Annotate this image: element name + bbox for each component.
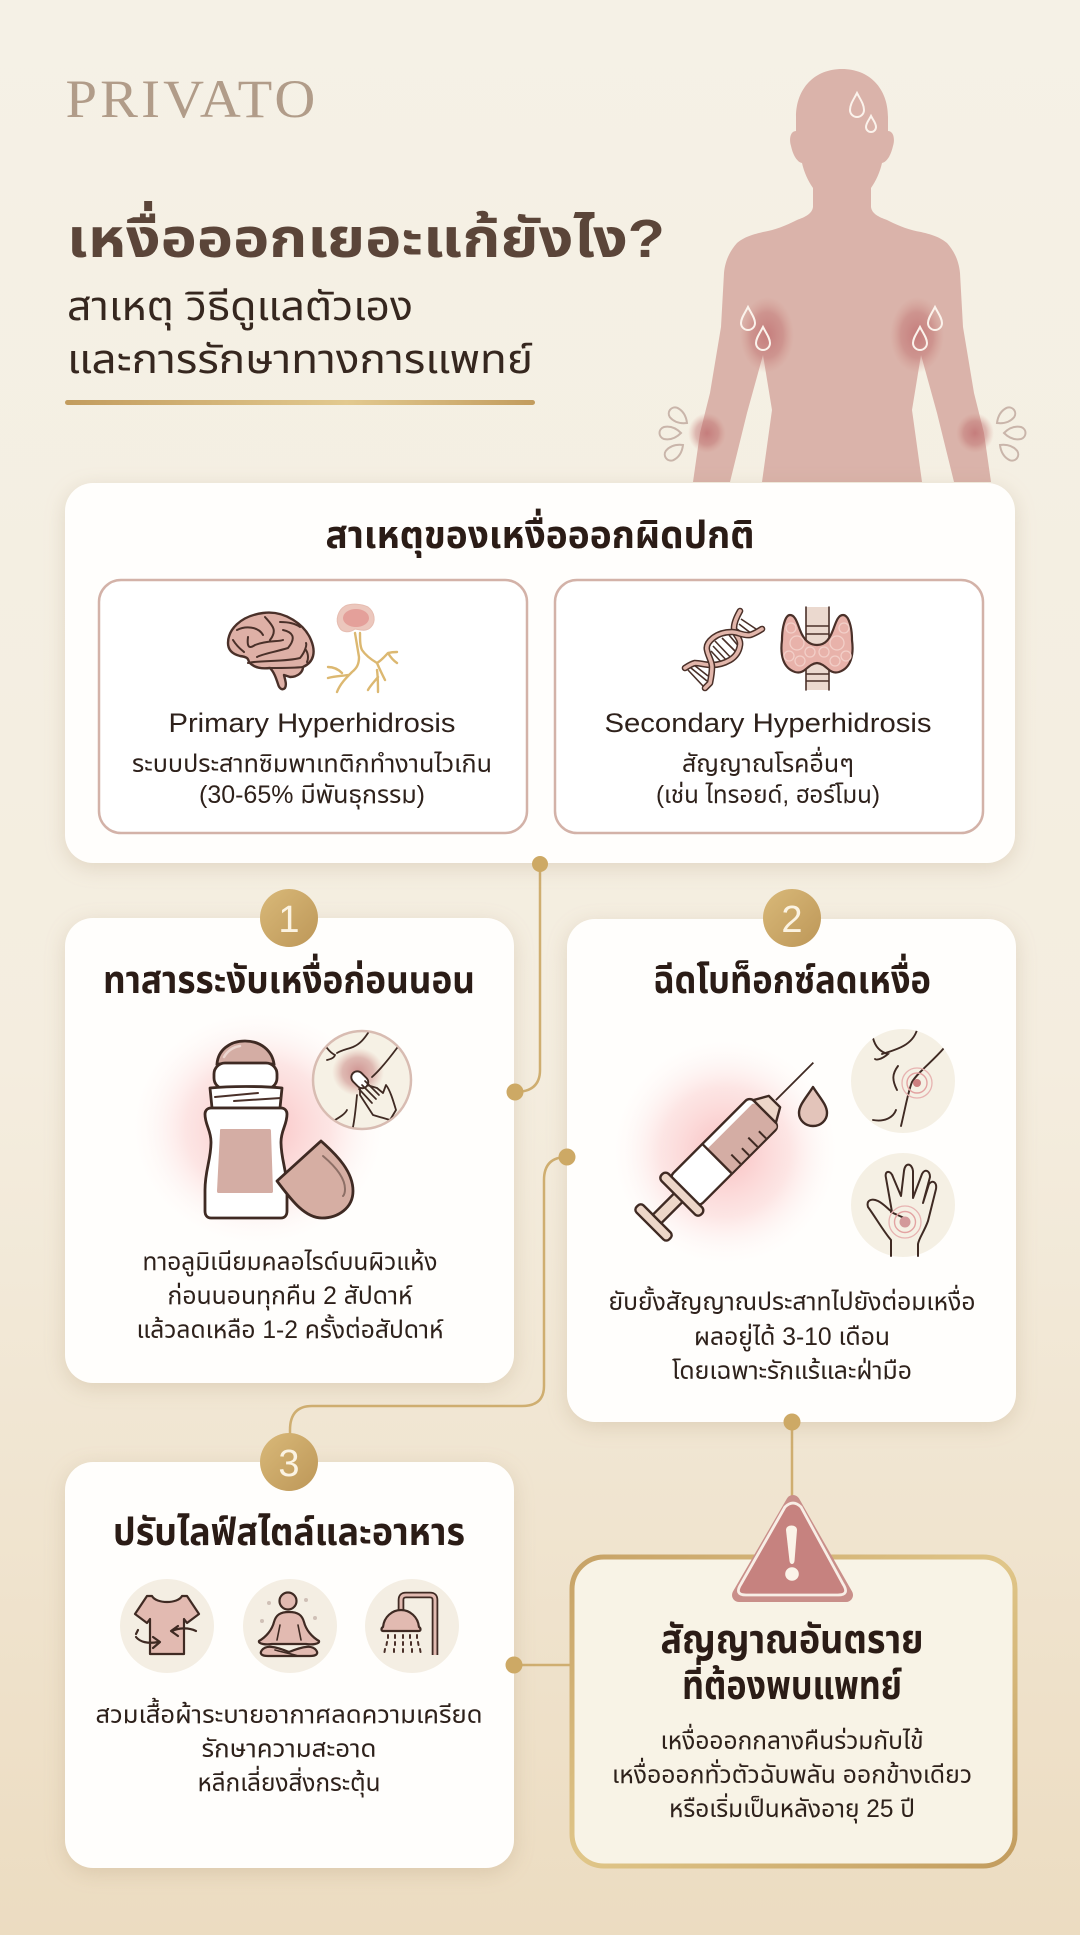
connector dot: step 3 bbox=[506, 1656, 522, 1674]
icon: meditation bbox=[243, 1579, 337, 1673]
step 2 text: โดยเฉพาะรักแร้และฝ่ามือ bbox=[672, 1357, 912, 1385]
gold divider under title bbox=[65, 400, 535, 405]
icon: breathable shirt bbox=[120, 1579, 214, 1673]
connector dot: causes bbox=[532, 856, 548, 872]
panel: step 1 antiperspirant bbox=[65, 889, 524, 1383]
step 3 heading: ปรับไลฟ์สไตล์และอาหาร bbox=[113, 1512, 465, 1554]
panel: step 2 botox bbox=[558, 889, 1016, 1430]
step 1 text bbox=[136, 1248, 444, 1344]
warning text: เหงื่อออกกลางคืนร่วมกับไข้ bbox=[660, 1723, 924, 1755]
icon: warning triangle bbox=[738, 1502, 846, 1595]
connector dot: step 2 bottom bbox=[784, 1414, 800, 1430]
label: secondary hyperhidrosis: Secondary Hyperhidrosis bbox=[604, 708, 932, 738]
badge: number 2: 2 bbox=[781, 899, 803, 941]
connector lines between panels bbox=[290, 864, 792, 1665]
icon: applying to armpit bbox=[313, 1031, 411, 1129]
warning text: หรือเริ่มเป็นหลังอายุ 25 ปี bbox=[669, 1792, 915, 1824]
badge: number 2 bbox=[763, 889, 821, 947]
warning heading: ที่ต้องพบแพทย์ bbox=[682, 1657, 902, 1708]
text: primary description bbox=[132, 750, 492, 810]
label: primary hyperhidrosis: Primary Hyperhidrosis bbox=[168, 708, 456, 738]
illustration: roll-on deodorant bbox=[126, 1006, 390, 1250]
badge: number 3 bbox=[260, 1433, 318, 1491]
warning heading: สัญญาณอันตราย bbox=[660, 1618, 924, 1662]
subtitle bbox=[67, 285, 533, 382]
step 1 text: ก่อนนอนทุกคืน 2 สัปดาห์ bbox=[168, 1282, 413, 1311]
badge: number 3: 3 bbox=[278, 1443, 300, 1485]
connector dot: step 2 top bbox=[558, 1148, 576, 1166]
panel: causes of abnormal sweating bbox=[65, 483, 1015, 863]
text: primary description: (30-65% มีพันธุกรรม) bbox=[199, 781, 425, 810]
badge: number 1: 1 bbox=[278, 899, 300, 941]
step 3 text: รักษาความสะอาด bbox=[202, 1735, 376, 1763]
text: secondary description: สัญญาณโรคอื่นๆ bbox=[682, 746, 854, 778]
text: secondary description: (เช่น ไทรอยด์, ฮอร์โมน) bbox=[656, 781, 880, 809]
subtitle: และการรักษาทางการแพทย์ bbox=[67, 338, 533, 382]
connector dot: step 1 bbox=[506, 1084, 524, 1100]
brand logo: PRIVATO: PRIVATO bbox=[66, 69, 318, 129]
warning text: เหงื่อออกทั่วตัวฉับพลัน ออกข้างเดียว bbox=[612, 1757, 972, 1789]
step 1 text: ทาอลูมิเนียมคลอไรด์บนผิวแห้ง bbox=[142, 1248, 438, 1277]
icon: shower bbox=[365, 1579, 459, 1673]
icon: DNA helix bbox=[685, 611, 762, 688]
step 2 text: ผลอยู่ได้ 3-10 เดือน bbox=[694, 1323, 890, 1352]
warning text bbox=[612, 1723, 972, 1824]
text: primary description: ระบบประสาทซิมพาเทติกทำงานไวเกิน bbox=[132, 750, 492, 778]
step 3 text: หลีกเลี่ยงสิ่งกระตุ้น bbox=[198, 1765, 380, 1798]
step 2 text: ยับยั้งสัญญาณประสาทไปยังต่อมเหงื่อ bbox=[608, 1284, 976, 1316]
sweat glow: armpits and elbows bbox=[688, 297, 994, 453]
step 3 text: สวมเสื้อผ้าระบายอากาศลดความเครียด bbox=[96, 1697, 482, 1729]
human figure illustration with sweat zones bbox=[660, 69, 1026, 482]
step 2 heading: ฉีดโบท็อกซ์ลดเหงื่อ bbox=[653, 953, 931, 1002]
sub-panel: secondary hyperhidrosis bbox=[555, 580, 983, 833]
panel: warning signs bbox=[572, 1502, 1015, 1866]
warning heading bbox=[660, 1618, 924, 1708]
step 1 text: แล้วลดเหลือ 1-2 ครั้งต่อสัปดาห์ bbox=[136, 1313, 444, 1344]
subtitle: สาเหตุ วิธีดูแลตัวเอง bbox=[67, 285, 413, 330]
step 1 heading: ทาสารระงับเหงื่อก่อนนอน bbox=[103, 953, 475, 1002]
step 2 text bbox=[608, 1284, 976, 1385]
main title: เหงื่อออกเยอะแก้ยังไง? bbox=[67, 201, 665, 269]
step 3 text bbox=[96, 1697, 482, 1798]
sub-panel: primary hyperhidrosis bbox=[99, 580, 527, 833]
sweat drops bbox=[741, 93, 942, 350]
illustration: syringe bbox=[607, 1034, 843, 1270]
icon: brain bbox=[228, 613, 314, 689]
elbow sweat drops bbox=[660, 405, 1026, 463]
badge: number 1 bbox=[260, 889, 318, 947]
text: secondary description bbox=[656, 746, 880, 809]
icon: armpit injection site bbox=[851, 1029, 955, 1133]
icon: palm injection site bbox=[851, 1153, 955, 1257]
panel: step 3 lifestyle bbox=[65, 1433, 522, 1868]
icon: sympathetic nerve bbox=[328, 604, 397, 692]
icon: thyroid bbox=[781, 607, 853, 690]
panel heading: causes: สาเหตุของเหงื่อออกผิดปกติ bbox=[326, 508, 754, 558]
